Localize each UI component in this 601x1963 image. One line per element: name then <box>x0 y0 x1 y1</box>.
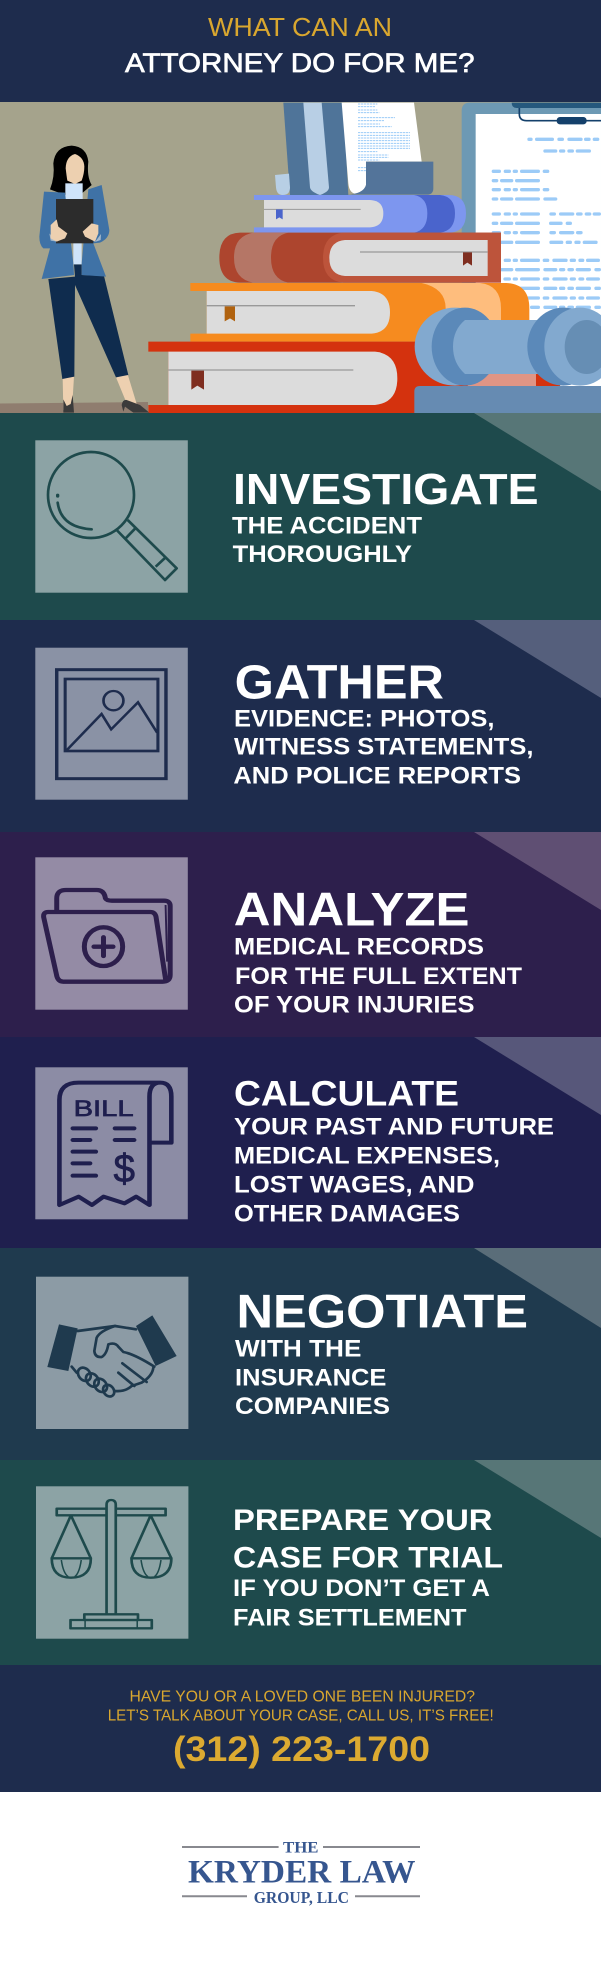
text: prepare: FAIR SETTLEMENT <box>233 1604 467 1631</box>
panel: negotiate <box>0 1248 601 1460</box>
text: gather: WITNESS STATEMENTS, <box>234 734 534 761</box>
text: calculate: YOUR PAST AND FUTURE <box>234 1114 554 1141</box>
text: gather: GATHER <box>235 655 444 709</box>
call to action subtext: LET’S TALK ABOUT YOUR CASE, CALL US, IT’S FREE! <box>108 1708 494 1725</box>
panel: calculate <box>0 1037 601 1248</box>
icon: photo <box>35 648 188 800</box>
text: negotiate <box>235 1286 528 1420</box>
title line two: ATTORNEY DO FOR ME? <box>125 48 474 78</box>
red book <box>148 342 570 413</box>
icon: handshake <box>36 1277 188 1429</box>
panel: investigate <box>0 413 601 620</box>
floor <box>0 402 148 413</box>
icon: bill: BILL <box>74 1096 134 1121</box>
text: calculate: MEDICAL EXPENSES, <box>234 1142 500 1169</box>
text: analyze: FOR THE FULL EXTENT <box>235 963 522 990</box>
text: calculate: CALCULATE <box>234 1074 459 1113</box>
icon: scales of justice <box>36 1486 188 1639</box>
text: analyze: MEDICAL RECORDS <box>234 934 484 961</box>
text: prepare <box>233 1504 503 1631</box>
text: gather: EVIDENCE: PHOTOS, <box>234 706 494 733</box>
icon: bill: $ <box>114 1147 135 1191</box>
text: gather <box>233 655 534 789</box>
panel: gather <box>0 620 601 832</box>
rolled papers on top of books <box>275 103 433 195</box>
gavel <box>414 308 601 413</box>
phone number: (312) 223-1700 <box>173 1730 430 1769</box>
icon: medical folder <box>35 857 188 1010</box>
title line one: WHAT CAN AN <box>208 12 392 42</box>
panel: illustration <box>0 102 601 413</box>
text: investigate: THOROUGHLY <box>233 541 412 568</box>
icon: magnifying glass <box>35 440 188 593</box>
icon: clipboard with document <box>462 103 601 391</box>
orange book <box>190 283 529 342</box>
call to action text: HAVE YOU OR A LOVED ONE BEEN INJURED? <box>130 1688 475 1705</box>
icon: woman holding a folder <box>39 146 149 413</box>
text: gather: AND POLICE REPORTS <box>233 762 521 789</box>
text: negotiate: COMPANIES <box>235 1393 390 1420</box>
panel: call to action <box>0 1665 601 1792</box>
text: investigate: THE ACCIDENT <box>232 512 422 539</box>
text: negotiate: INSURANCE <box>235 1365 386 1392</box>
text: calculate: LOST WAGES, AND <box>234 1171 474 1198</box>
logo: The Kryder Law Group <box>182 1840 420 1907</box>
text: investigate: INVESTIGATE <box>233 465 538 514</box>
panel: analyze <box>0 832 601 1037</box>
icon: stacked books and gavel <box>148 103 601 413</box>
logo: The Kryder Law Group: THE <box>283 1840 318 1857</box>
text: prepare: PREPARE YOUR <box>233 1504 493 1537</box>
text: analyze: OF YOUR INJURIES <box>234 992 474 1019</box>
panel: prepare <box>0 1460 601 1665</box>
text: prepare: CASE FOR TRIAL <box>233 1541 503 1574</box>
red-brown book <box>219 233 501 283</box>
text: calculate: OTHER DAMAGES <box>234 1200 460 1227</box>
text: prepare: IF YOU DON’T GET A <box>233 1575 490 1602</box>
blue book <box>254 195 466 233</box>
title header <box>0 0 601 102</box>
text: negotiate: NEGOTIATE <box>236 1286 528 1339</box>
text: negotiate: WITH THE <box>235 1336 361 1363</box>
text: analyze: ANALYZE <box>234 884 470 937</box>
icon: bill <box>35 1067 188 1219</box>
logo: The Kryder Law Group: GROUP, LLC <box>254 1888 349 1907</box>
text: investigate <box>232 465 538 568</box>
text: analyze <box>234 884 522 1019</box>
text: calculate <box>234 1074 554 1227</box>
logo: The Kryder Law Group: KRYDER LAW <box>188 1855 416 1891</box>
